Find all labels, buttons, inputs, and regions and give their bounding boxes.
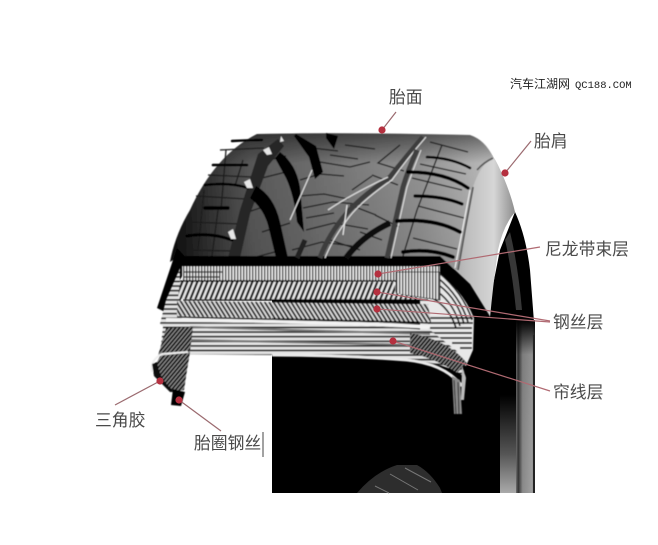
tread surface: [157, 133, 493, 318]
left dark hatch: [158, 327, 193, 356]
bead wire: [171, 389, 185, 406]
callout: 胎圈钢丝 (bead wire): 胎圈钢丝: [194, 434, 261, 453]
callout: 胎肩 (shoulder): 胎肩: [534, 132, 568, 151]
sidewall: [440, 136, 515, 318]
nylon band layer: [182, 266, 440, 281]
lower carcass right curve: [272, 355, 462, 386]
watermark: 汽车江湖网: [510, 76, 570, 91]
callout: 胎圈钢丝 (bead wire): [175, 396, 263, 457]
carcass plies: [160, 318, 466, 378]
lower-left apex fold: [155, 352, 190, 392]
callout: 钢丝层 (steel belts): [373, 288, 603, 332]
steel belt upper: [178, 281, 428, 300]
callout: 钢丝层 (steel belts): 钢丝层: [553, 313, 603, 332]
tread wide grooves: [157, 133, 491, 318]
callout: 胎面 (tread): 胎面: [389, 88, 423, 107]
callout: 尼龙带束层 (nylon band): 尼龙带束层: [545, 240, 629, 259]
callout: 帘线层 (cord ply): [389, 337, 603, 402]
callout: 尼龙带束层 (nylon band): [374, 240, 629, 278]
sidewall groove line: [458, 158, 493, 270]
tread thin lug lines: [186, 142, 468, 258]
left ply wrap: [160, 268, 182, 330]
callout: 三角胶 (apex): [95, 377, 164, 430]
tread shoulder sipes: [187, 140, 470, 257]
callout: 帘线层 (cord ply): 帘线层: [553, 383, 603, 402]
callout: 三角胶 (apex): 三角胶: [95, 411, 146, 430]
cross-section layers: [152, 266, 474, 414]
right ply wrap curved: [420, 268, 474, 366]
rim side: dark inner wheel: [272, 212, 535, 493]
right lower bead end: [452, 376, 462, 414]
watermark: QC188.COM: [575, 80, 632, 92]
tread slanted light channels: [290, 137, 426, 258]
watermark: [510, 76, 632, 92]
tire illustration: [152, 133, 535, 493]
right dark hatch: [410, 333, 467, 373]
bottom worn tread piece: [357, 465, 442, 493]
tread block highlights: [228, 136, 284, 239]
steel belt lower: [177, 301, 431, 322]
nylon band end detail: [396, 272, 440, 300]
callout: 胎肩 (shoulder): [501, 132, 568, 177]
callout: 胎面 (tread): [378, 88, 423, 134]
